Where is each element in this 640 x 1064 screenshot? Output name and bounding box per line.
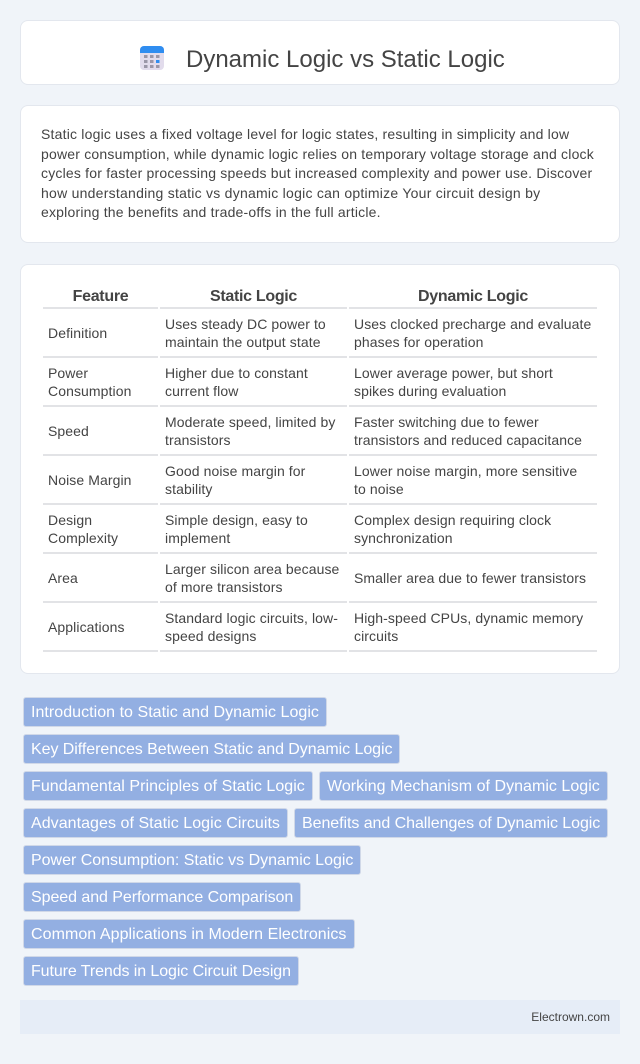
topic: introduction: Introduction to Static and Dynamic Logic — [31, 704, 319, 721]
topic: fundamental principles — [23, 771, 313, 801]
row: definition: maintain the output state — [165, 334, 321, 350]
row: design complexity: Simple design, easy to — [165, 512, 308, 528]
row: applications: High-speed CPUs, dynamic memory — [354, 610, 583, 626]
row: noise margin — [48, 463, 577, 497]
topic: benefits and challenges — [294, 808, 608, 838]
row: design complexity: Complex design requiring clock — [354, 512, 551, 528]
row: definition — [48, 316, 591, 350]
row: design complexity: implement — [165, 530, 230, 546]
intro text: cycles for faster processing speeds but increased complexity and power use. Discover — [41, 165, 592, 181]
topic: introduction — [23, 697, 327, 727]
row: definition: Uses steady DC power to — [165, 316, 326, 332]
icon: calendar grid — [140, 46, 164, 70]
intro text: power consumption, while dynamic logic relies on temporary voltage storage and clock — [41, 146, 594, 162]
topic: advantages — [23, 808, 288, 838]
topic: power consumption — [23, 845, 361, 875]
row: design complexity — [48, 512, 552, 546]
row: noise margin: Lower noise margin, more sensitive — [354, 463, 577, 479]
row: power consumption: current flow — [165, 383, 238, 399]
topic: speed and performance: Speed and Performance Comparison — [31, 889, 293, 906]
footer — [20, 1000, 620, 1034]
row: area: Area — [48, 570, 78, 586]
topic: fundamental principles: Fundamental Principles of Static Logic — [31, 778, 305, 795]
topic: key differences — [23, 734, 400, 764]
topic: advantages: Advantages of Static Logic Circuits — [31, 815, 280, 832]
row: definition: Uses clocked precharge and evaluate — [354, 316, 591, 332]
row: noise margin: to noise — [354, 481, 404, 497]
topic: speed and performance — [23, 882, 301, 912]
intro card — [20, 105, 620, 243]
row: speed — [48, 414, 582, 448]
topic: working mechanism — [319, 771, 608, 801]
topic: working mechanism: Working Mechanism of Dynamic Logic — [327, 778, 600, 795]
row: design complexity: synchronization — [354, 530, 453, 546]
row: power consumption: Power — [48, 365, 88, 381]
row: area — [48, 561, 586, 595]
row: noise margin: Good noise margin for — [165, 463, 305, 479]
intro text: exploring the benefits and trade-offs in the full article. — [41, 204, 381, 220]
row: power consumption: Higher due to constant — [165, 365, 308, 381]
title: Dynamic Logic vs Static Logic — [186, 46, 505, 73]
column headings: Feature — [73, 288, 128, 305]
table card — [20, 264, 620, 674]
row: speed: Faster switching due to fewer — [354, 414, 539, 430]
row: noise margin: Noise Margin — [48, 472, 132, 488]
intro text: how understanding static vs dynamic logic can optimize Your circuit design by — [41, 185, 540, 201]
row: speed: transistors — [165, 432, 231, 448]
row: applications — [48, 610, 584, 644]
row: design complexity: Complexity — [48, 530, 118, 546]
topic: key differences: Key Differences Between Static and Dynamic Logic — [31, 741, 392, 758]
header card — [20, 20, 620, 85]
row: noise margin: stability — [165, 481, 212, 497]
row: power consumption: spikes during evaluation — [354, 383, 506, 399]
row: area: Smaller area due to fewer transistors — [354, 570, 586, 586]
topic: future trends: Future Trends in Logic Circuit Design — [31, 963, 291, 980]
row: definition: Definition — [48, 325, 107, 341]
row: power consumption — [48, 365, 553, 399]
row: applications: circuits — [354, 628, 398, 644]
topic: common applications: Common Applications in Modern Electronics — [31, 926, 346, 943]
intro text: Static logic uses a fixed voltage level for logic states, resulting in simplicity and low — [41, 126, 569, 142]
footer credit: Electrown.com — [531, 1010, 610, 1024]
row: speed: transistors and reduced capacitance — [354, 432, 582, 448]
comparison table — [43, 288, 597, 652]
row: area: Larger silicon area because — [165, 561, 339, 577]
column headings: Dynamic Logic — [418, 288, 528, 305]
row: design complexity: Design — [48, 512, 92, 528]
column headings — [73, 288, 528, 305]
column headings: Static Logic — [210, 288, 297, 305]
topic: power consumption: Power Consumption: Static vs Dynamic Logic — [31, 852, 353, 869]
topic: benefits and challenges: Benefits and Challenges of Dynamic Logic — [302, 815, 600, 832]
row: speed: Moderate speed, limited by — [165, 414, 335, 430]
row: applications: Applications — [48, 619, 125, 635]
topic: future trends — [23, 956, 299, 986]
row: speed: Speed — [48, 423, 89, 439]
row: area: of more transistors — [165, 579, 283, 595]
row: power consumption: Lower average power, but short — [354, 365, 553, 381]
row: applications: Standard logic circuits, low- — [165, 610, 338, 626]
row: definition: phases for operation — [354, 334, 483, 350]
topic links — [23, 697, 608, 986]
topic: common applications — [23, 919, 355, 949]
row: applications: speed designs — [165, 628, 256, 644]
row: power consumption: Consumption — [48, 383, 131, 399]
intro text — [41, 126, 594, 220]
